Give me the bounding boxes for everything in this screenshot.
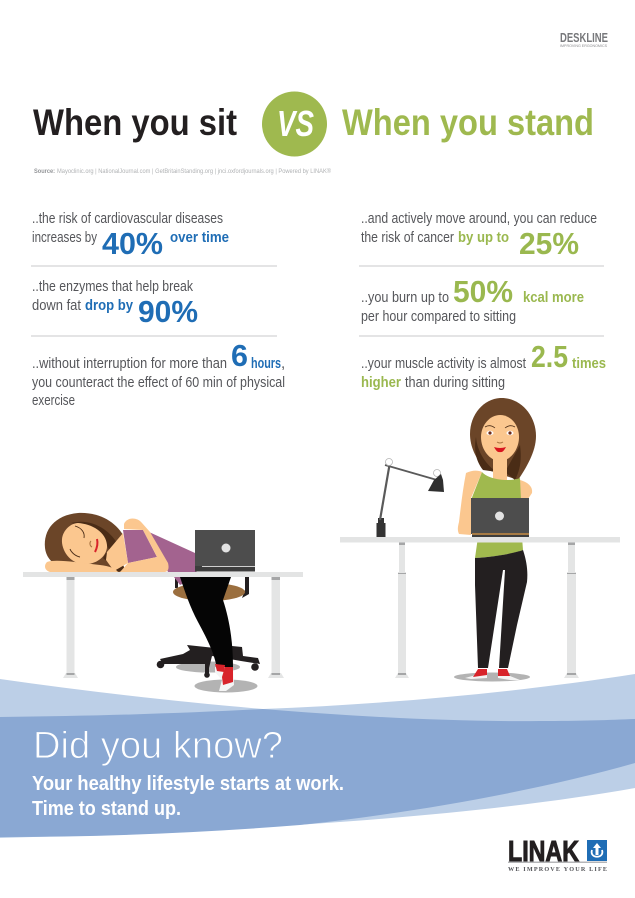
icon: LINAK arrow badge	[587, 840, 607, 861]
text: call to action	[32, 772, 344, 820]
hair	[470, 398, 536, 480]
panel: when you sit facts	[31, 210, 285, 409]
hair	[45, 513, 124, 572]
floor shadows	[176, 662, 258, 692]
logo: Deskline	[560, 30, 608, 48]
fact: enzymes drop 90%: ..the enzymes that help break	[32, 278, 193, 295]
neck	[106, 533, 128, 571]
fact: cancer risk 25%: by up to	[458, 229, 509, 246]
fact: 6 hours sitting: hours	[251, 355, 281, 372]
laptop	[471, 498, 529, 537]
fact: 6 hours sitting	[32, 338, 285, 409]
face	[62, 523, 107, 564]
desk top	[340, 537, 620, 542]
sneakers	[465, 669, 520, 680]
fact: enzymes drop 90%: down fat	[32, 297, 82, 314]
fact: 6 hours sitting: ..without interruption for more than	[32, 355, 227, 372]
face	[481, 415, 519, 461]
fact: enzymes drop 90%	[32, 278, 198, 329]
neck and arms	[458, 456, 532, 535]
fact: cancer risk 25%	[361, 210, 597, 261]
fact: cardiovascular risk 40%: over time	[170, 229, 229, 246]
fact: muscle activity 2.5 times	[361, 339, 606, 391]
desk legs	[63, 577, 284, 678]
fact: enzymes drop 90%: drop by	[85, 297, 134, 314]
badge: VS: VS	[277, 103, 314, 144]
fact: cardiovascular risk 40%: 40%	[102, 226, 163, 261]
desk legs	[395, 542, 579, 678]
fact: cardiovascular risk 40%	[32, 210, 229, 261]
desk lamp	[376, 458, 444, 537]
fact: burn 50% more kcal: per hour compared to sitting	[361, 308, 516, 325]
illustration: sitting woman asleep at desk	[23, 513, 303, 692]
text: call to action: Your healthy lifestyle starts at work.	[32, 772, 344, 795]
logo: LINAK: WE IMPROVE YOUR LIFE	[508, 866, 607, 873]
shirt	[471, 472, 523, 558]
title: When you sit: When you sit	[33, 102, 237, 143]
arms	[45, 519, 169, 572]
fact: 6 hours sitting: ,	[281, 355, 285, 372]
text: call to action: Time to stand up.	[32, 797, 181, 820]
trousers	[475, 550, 527, 668]
illustration: standing woman at desk	[340, 398, 620, 682]
fact: burn 50% more kcal	[361, 274, 584, 325]
floor shadow	[454, 672, 530, 682]
fact: cancer risk 25%: the risk of cancer	[361, 229, 454, 246]
fact: muscle activity 2.5 times: ..your muscle activity is almost	[361, 355, 527, 372]
office chair	[157, 577, 260, 678]
fact: enzymes drop 90%: 90%	[138, 294, 198, 329]
shirt	[123, 530, 197, 585]
fact: burn 50% more kcal: 50%	[453, 274, 513, 309]
fact: muscle activity 2.5 times: than during sitting	[405, 374, 505, 391]
wave: dark blue banner	[0, 709, 635, 837]
logo: Deskline: DESKLINE	[560, 30, 608, 45]
legs	[180, 577, 233, 667]
fact: 6 hours sitting: exercise	[32, 392, 75, 409]
desk top	[23, 572, 303, 577]
wave: light blue background	[0, 674, 635, 838]
fact: muscle activity 2.5 times: 2.5	[531, 339, 568, 374]
fact: muscle activity 2.5 times: times	[572, 355, 606, 372]
fact: burn 50% more kcal: kcal more	[523, 289, 584, 306]
source line: Source:	[34, 169, 55, 175]
logo: Deskline: IMPROVING ERGONOMICS	[560, 44, 608, 48]
panel: when you stand facts	[359, 210, 606, 391]
fact: 6 hours sitting: you counteract the effect of 60 min of physical	[32, 374, 285, 391]
laptop	[195, 530, 255, 572]
fact: cancer risk 25%: 25%	[519, 226, 579, 261]
fact: 6 hours sitting: 6	[231, 338, 248, 373]
badge: VS	[262, 92, 327, 156]
logo: LINAK: LINAK	[508, 836, 579, 868]
fact: cardiovascular risk 40%: ..the risk of cardiovascular diseases	[32, 210, 223, 227]
sneakers	[215, 664, 234, 691]
heading: Did you know?: Did you know?	[33, 725, 283, 767]
source line: Mayoclinic.org | NationalJournal.com | GetBritainStanding.org | jnci.oxfordjournals.org | Powered by LINAK®	[57, 168, 332, 175]
fact: burn 50% more kcal: ..you burn up to	[361, 289, 449, 306]
fact: muscle activity 2.5 times: higher	[361, 374, 401, 391]
fact: cardiovascular risk 40%: increases by	[32, 229, 97, 246]
title: When you stand: When you stand	[342, 102, 594, 143]
